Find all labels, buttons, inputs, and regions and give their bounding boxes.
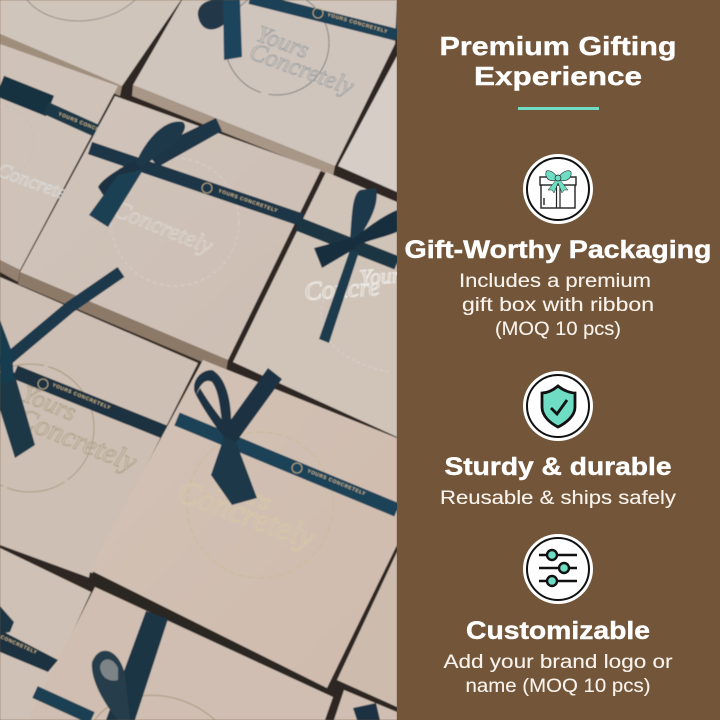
box: bottom left (0, 548, 91, 720)
box: bottom centre with ribbon (28, 587, 333, 720)
text: packaging description: Includes a premium (459, 271, 651, 292)
text: customizable description: Add your brand logo or (444, 652, 673, 673)
heading: gift-worthy packaging: Gift-Worthy Packaging (404, 236, 712, 264)
title (440, 31, 676, 91)
box: right edge lower (337, 552, 397, 707)
heading: sturdy and durable: Sturdy & durable (444, 453, 672, 481)
box: left third row with bow: Concretely (12, 402, 141, 479)
box: right middle with bow (233, 172, 401, 437)
photo: gift boxes with ribbons (0, 0, 401, 720)
box: top right with ribbon: Yours (253, 21, 312, 64)
text: packaging description: (MOQ 10 pcs) (495, 319, 621, 340)
box: top left (0, 0, 181, 96)
box: centre upper with bow (18, 96, 321, 372)
box: top right with ribbon: Concretely (246, 38, 358, 101)
title: Premium Gifting (440, 31, 676, 61)
box: top right with ribbon: YOURS CONCRETELY (326, 12, 388, 35)
title: Experience (474, 61, 642, 91)
box: right edge upper (338, 56, 397, 192)
box: left third row with bow (0, 272, 198, 578)
box: top right with ribbon (132, 0, 397, 176)
text: customizable description: name (MOQ 10 pcs) (466, 676, 650, 697)
box: bottom right corner (334, 690, 397, 720)
text: packaging description: gift box with ribbon (462, 295, 654, 316)
box: right middle with bow: Your (359, 262, 401, 290)
box: bottom left: CONCRETELY (0, 634, 38, 656)
box: centre large with bow: YOURS CONCRETELY (306, 468, 367, 497)
box: left third row with bow: Yours (18, 381, 80, 427)
box: centre large with bow: Concretely (172, 474, 320, 557)
box: left third row with bow: YOURS CONCRETELY (51, 382, 112, 411)
box: centre large with bow: Yours (213, 471, 275, 517)
text: packaging description (459, 271, 654, 340)
icon: gift box (523, 154, 593, 224)
icon: shield (523, 371, 593, 441)
box: left second row: YOURS CONCRETELY (57, 111, 118, 140)
brown panel (397, 0, 720, 720)
box: centre upper with bow: YOURS CONCRETELY (217, 188, 279, 214)
box: right middle with bow: Concre (303, 272, 381, 306)
box: left second row (0, 44, 118, 282)
box: centre upper with bow: Concretely (110, 196, 217, 260)
icon: sliders (523, 534, 593, 604)
text: sturdy description: Reusable & ships safely (440, 488, 677, 509)
title underline (518, 107, 599, 110)
text: customizable description (444, 652, 673, 697)
heading: customizable: Customizable (466, 617, 650, 645)
box: centre large with bow (88, 360, 397, 700)
